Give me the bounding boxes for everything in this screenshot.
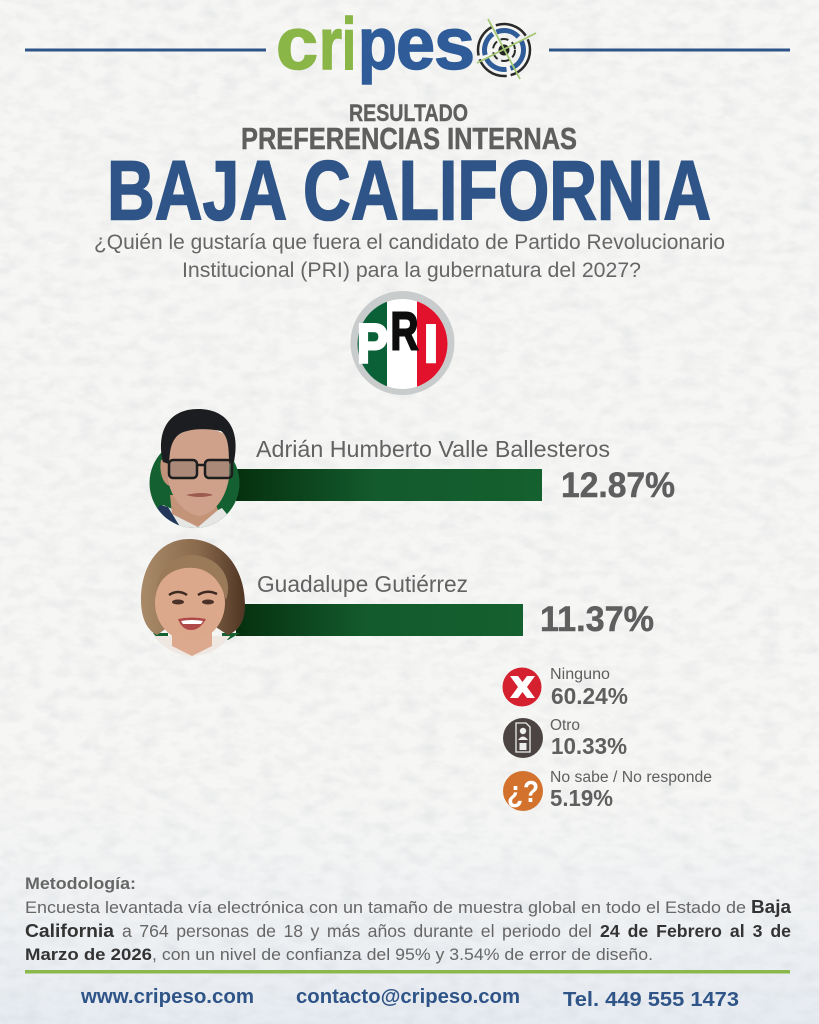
footer contacts: www.cripeso.com — [80, 986, 254, 1008]
label: ninguno: Ninguno — [550, 666, 610, 683]
candidate 1: name: Adrián Humberto Valle Ballesteros — [256, 436, 610, 462]
label: no sabe — [550, 769, 712, 811]
label: otro: Otro — [550, 717, 580, 734]
methodology text: California — [25, 921, 115, 941]
label: no sabe: No sabe / No responde — [550, 769, 712, 786]
candidate 1: portrait — [150, 409, 240, 530]
logo: cripeso with header rules: r — [319, 4, 342, 85]
label: otro — [550, 717, 627, 759]
logo: cripeso with header rules: p — [358, 4, 397, 85]
candidate 1: bar — [236, 469, 542, 501]
logo: cripeso with header rules — [25, 4, 790, 85]
heading: resultado: RESULTADO — [349, 100, 468, 127]
logo: cripeso with header rules: e — [396, 4, 435, 85]
footer contacts: Tel. 449 555 1473 — [563, 989, 739, 1011]
methodology text: , con un nivel de confianza del 95% y 3.54% de error de diseño. — [152, 946, 653, 964]
icon: ninguno red X — [502, 668, 542, 706]
logo: cripeso with header rules: s — [434, 4, 475, 85]
methodology text — [25, 875, 792, 964]
icon: PRI logo: P — [357, 312, 388, 374]
label: no sabe: 5.19% — [550, 785, 613, 811]
survey question — [94, 231, 725, 282]
methodology text: a 764 personas de 18 y más años durante el periodo del — [122, 921, 592, 941]
icon: PRI logo: I — [423, 312, 439, 374]
icon: PRI logo: R — [390, 302, 418, 362]
logo: cripeso with header rules: c — [276, 4, 318, 85]
survey question: ¿Quién le gustaría que fuera el candidato de Partido Revolucionario — [94, 231, 725, 254]
methodology text: Metodología: — [25, 875, 136, 893]
icon: no sabe question marks: ¿? — [507, 774, 539, 809]
candidate 2: percentage: 11.37% — [540, 600, 654, 639]
label: ninguno — [550, 666, 628, 709]
heading: preferencias internas: PREFERENCIAS INTERNAS — [241, 122, 577, 156]
candidate 2: portrait — [139, 539, 247, 658]
icon: otro ballot — [503, 718, 543, 758]
survey question: Institucional (PRI) para la gubernatura del 2027? — [182, 259, 641, 282]
label: ninguno: 60.24% — [551, 683, 628, 709]
footer rule — [25, 970, 790, 974]
candidate 1: percentage: 12.87% — [561, 466, 675, 505]
logo: cripeso with header rules: i — [342, 4, 356, 85]
methodology text: Marzo de 2026 — [25, 946, 152, 964]
footer contacts: contacto@cripeso.com — [296, 986, 520, 1008]
label: otro: 10.33% — [551, 733, 627, 759]
candidate 2: name: Guadalupe Gutiérrez — [257, 571, 468, 597]
footer contacts — [80, 986, 739, 1011]
methodology text: Baja — [751, 897, 792, 917]
candidate 2: bar — [236, 604, 523, 636]
icon: PRI logo — [350, 291, 454, 395]
methodology text: 24 de Febrero al 3 de — [600, 921, 791, 941]
methodology text: Encuesta levantada vía electrónica con un tamaño de muestra global en todo el Estado de — [25, 899, 746, 917]
